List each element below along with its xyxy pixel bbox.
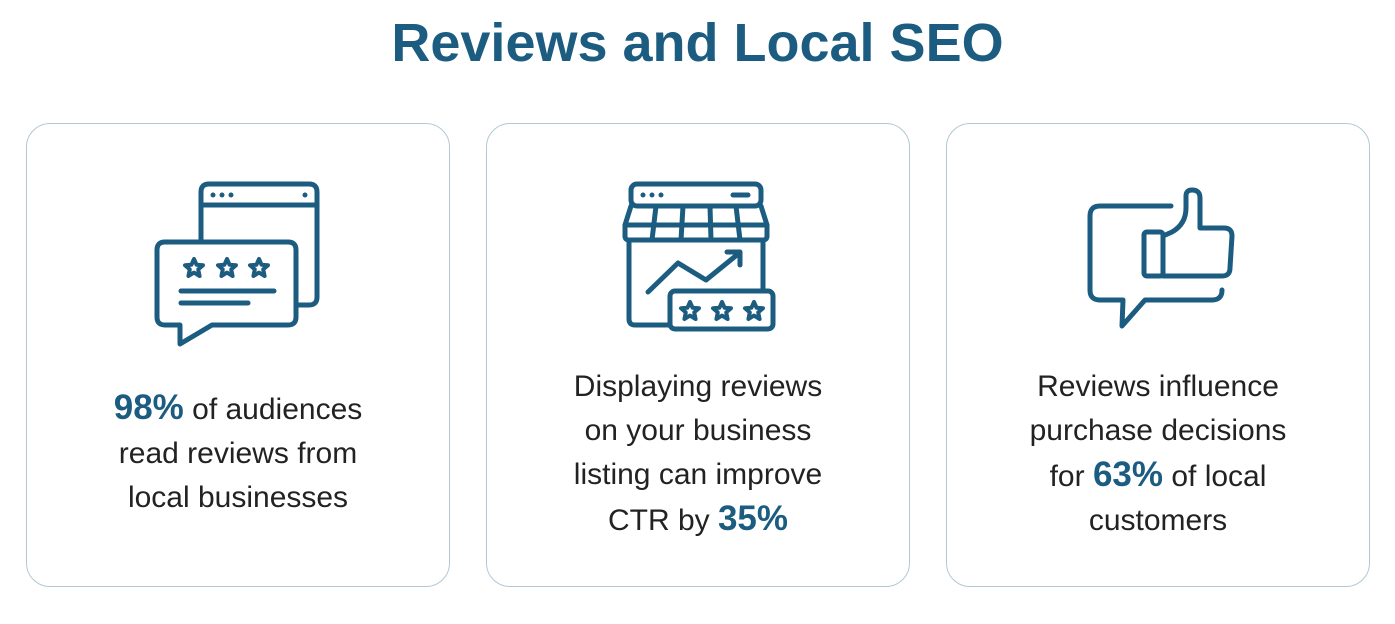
icon: review window with chat bubble [157, 184, 317, 344]
panel: card 3 [946, 123, 1370, 587]
text block 3 [1030, 370, 1286, 537]
text block 2: listing can improve [574, 458, 822, 491]
text block 1: 98% of audiences [114, 388, 362, 427]
text block 1: local businesses [128, 481, 348, 514]
icon: thumbs up speech bubble [1090, 190, 1232, 326]
text block 3: for 63% of local [1050, 455, 1266, 494]
text block 1: read reviews from [119, 437, 357, 470]
icon: storefront with growth chart [625, 184, 773, 329]
title: Reviews and Local SEO [391, 13, 1004, 73]
text block 2: CTR by 35% [608, 499, 788, 538]
text block 3: purchase decisions [1030, 414, 1286, 447]
text block 2: Displaying reviews [574, 370, 822, 403]
text block 3: customers [1089, 504, 1227, 537]
text block 2 [574, 370, 822, 538]
text block 1 [114, 388, 362, 514]
text block 2: on your business [585, 414, 811, 447]
panel: card 2 [486, 123, 910, 587]
text block 3: Reviews influence [1037, 370, 1279, 403]
panel: card 1 [26, 123, 450, 587]
